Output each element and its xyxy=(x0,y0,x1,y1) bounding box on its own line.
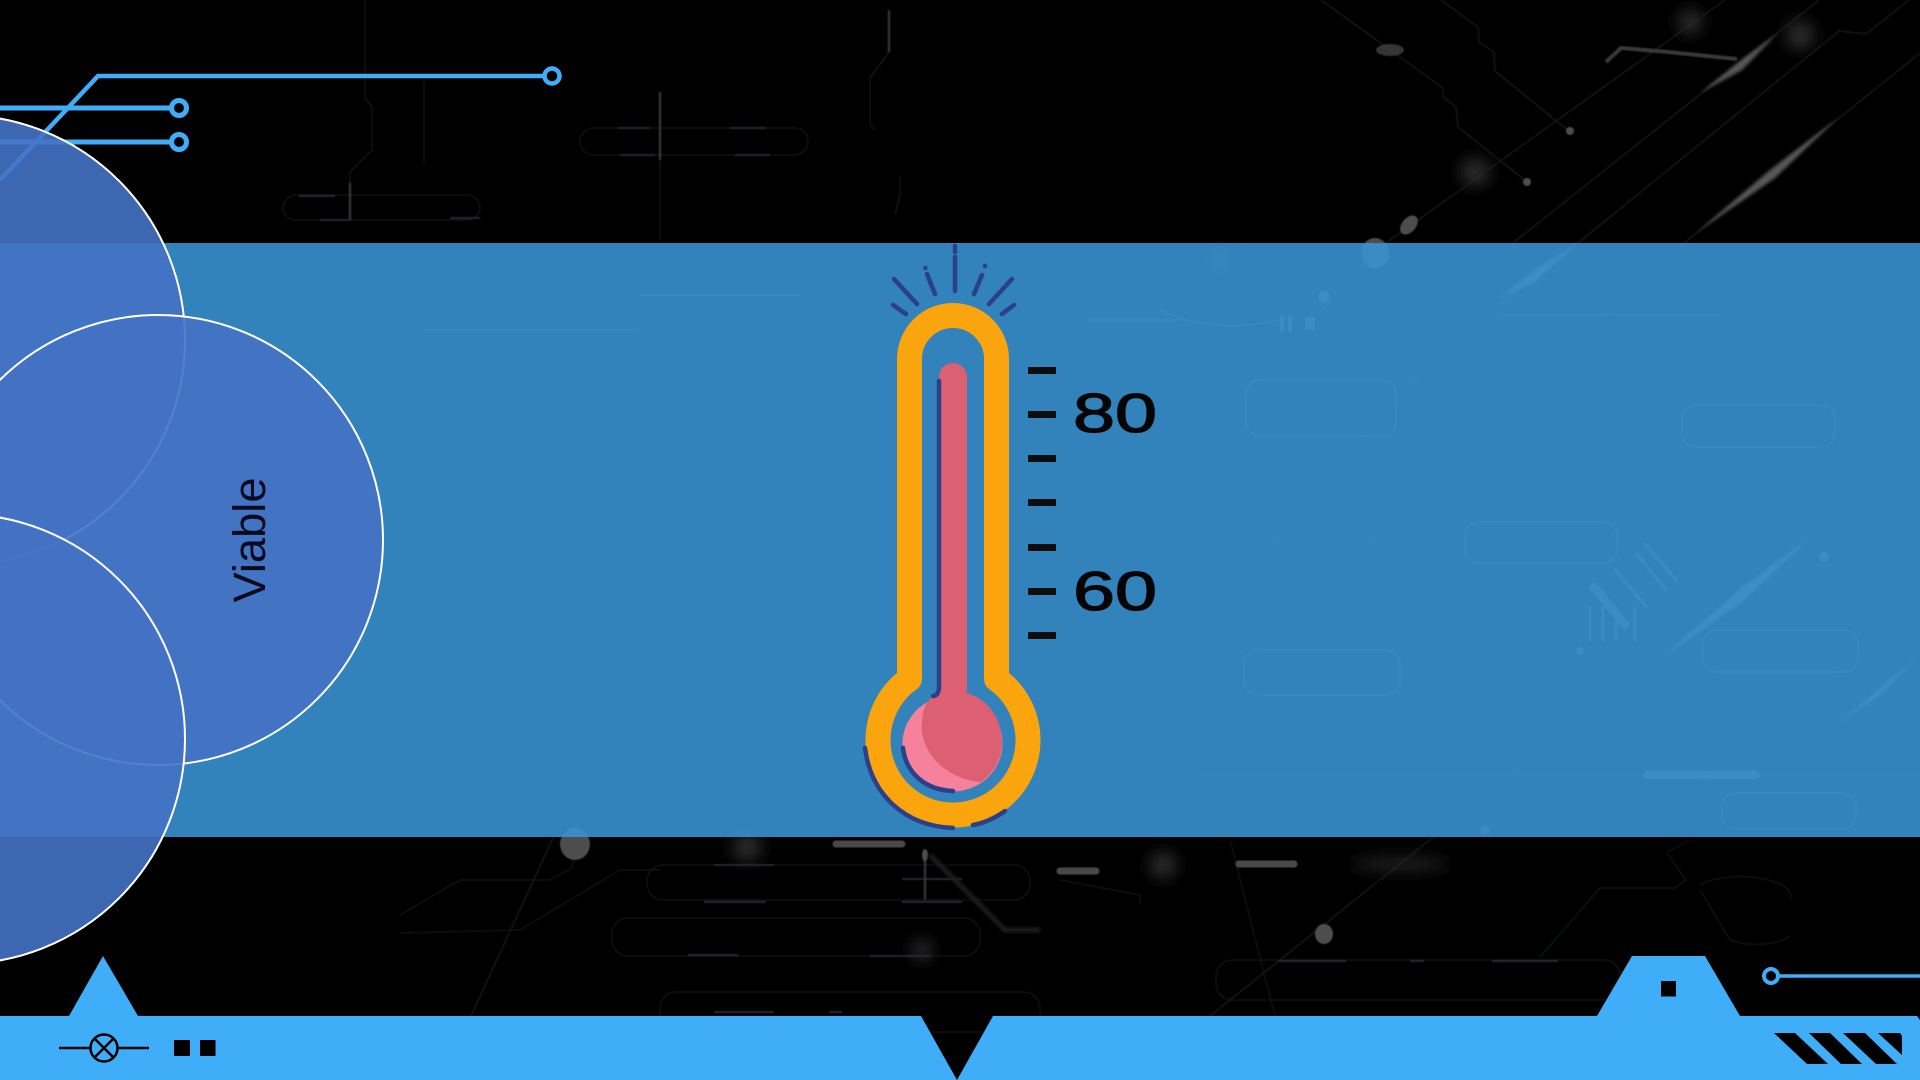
label: Viable: Viable xyxy=(224,478,275,602)
panel: blue horizontal band xyxy=(0,243,1920,837)
circle: bottom xyxy=(0,514,185,964)
icon: square on trapezoid xyxy=(1661,981,1676,996)
thermometer: orange outline xyxy=(878,316,1028,815)
thermometer: red mercury column xyxy=(922,363,1002,782)
icon: crossed circle on line xyxy=(59,1034,149,1062)
thermometer icon xyxy=(865,246,1028,828)
scale label: 80: 80 xyxy=(1073,382,1157,444)
icon: two black squares xyxy=(174,1040,216,1056)
circle: top xyxy=(0,115,185,565)
thermometer: red mercury pink base xyxy=(902,696,1002,792)
band circuit traces xyxy=(423,295,1858,829)
venn circles xyxy=(0,115,383,964)
circle: middle xyxy=(0,315,383,765)
connector line right xyxy=(1764,969,1920,983)
bottom bar with triangular tabs xyxy=(0,956,1920,1080)
scale label: 60: 60 xyxy=(1073,560,1157,622)
hazard stripes xyxy=(1774,1033,1902,1064)
thermometer: navy accent lines xyxy=(865,246,1014,828)
temperature scale ticks xyxy=(1028,367,1056,639)
connector lines with end nodes xyxy=(0,68,560,180)
